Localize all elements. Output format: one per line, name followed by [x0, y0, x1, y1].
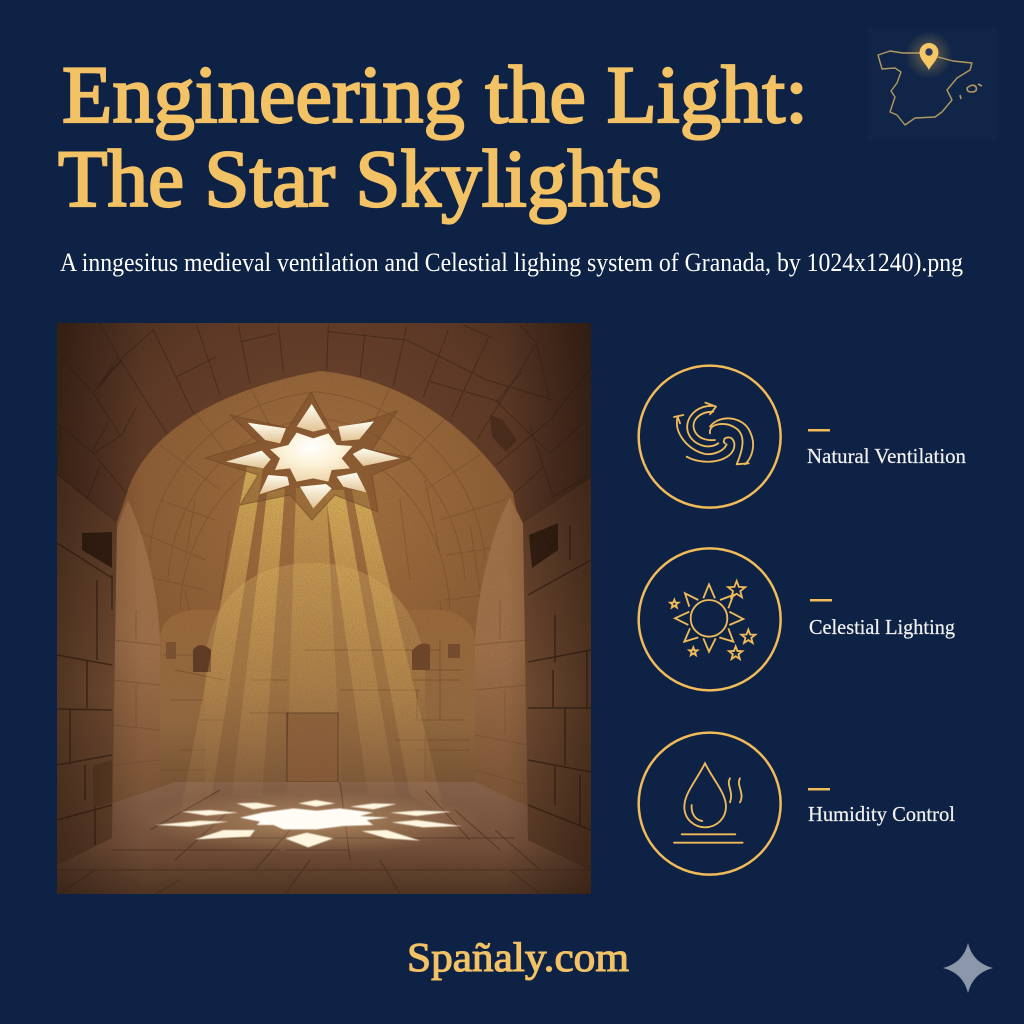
right inner side wall — [475, 498, 528, 806]
back wall — [160, 610, 475, 790]
dark stone patch — [490, 415, 517, 452]
icon: air swirl — [639, 366, 781, 508]
stone grain — [82, 334, 557, 806]
dash — [808, 429, 830, 432]
title — [58, 49, 808, 224]
floor joints — [57, 782, 590, 894]
right front wall — [523, 477, 592, 870]
label: Humidity Control — [808, 802, 955, 826]
dash — [808, 788, 830, 790]
back wall stones — [160, 640, 470, 780]
star of light on floor — [155, 800, 462, 847]
icon: sun and stars — [639, 548, 781, 690]
feature: celestial lighting — [639, 548, 955, 690]
icon: four-point sparkle — [943, 943, 993, 993]
niche left — [82, 532, 112, 568]
small niches — [193, 645, 211, 672]
side wall courses — [113, 600, 528, 785]
ceiling stone joints — [57, 324, 586, 522]
feature: humidity control — [639, 733, 955, 875]
feature: natural ventilation — [639, 366, 966, 508]
left front wall — [57, 475, 117, 865]
label: Natural Ventilation — [807, 444, 966, 468]
left inner side wall — [112, 500, 160, 803]
icon: location pin — [920, 43, 938, 70]
star skylight outline — [205, 392, 412, 520]
icon: water drop with vapour — [639, 733, 781, 875]
light beams — [180, 467, 445, 815]
floor glow — [164, 795, 456, 850]
locator map of Spain — [868, 28, 998, 140]
photo: vaulted chamber with star skylight — [57, 323, 592, 894]
star skylight — [226, 404, 400, 508]
door — [287, 713, 338, 782]
dash — [810, 599, 832, 602]
niche right — [529, 523, 558, 568]
vault — [116, 371, 516, 639]
label: Celestial Lighting — [809, 615, 955, 639]
footer brand: Spañaly.com — [407, 934, 629, 980]
back wall arch — [205, 563, 425, 698]
edge shading — [57, 323, 591, 894]
subtitle: A inngesitus medieval ventilation and Celestial lighing system of Granada, by 1024x1240).png — [60, 248, 963, 277]
floor — [57, 782, 591, 894]
title: Engineering the Light: — [62, 49, 808, 140]
title: The Star Skylights — [58, 133, 662, 224]
